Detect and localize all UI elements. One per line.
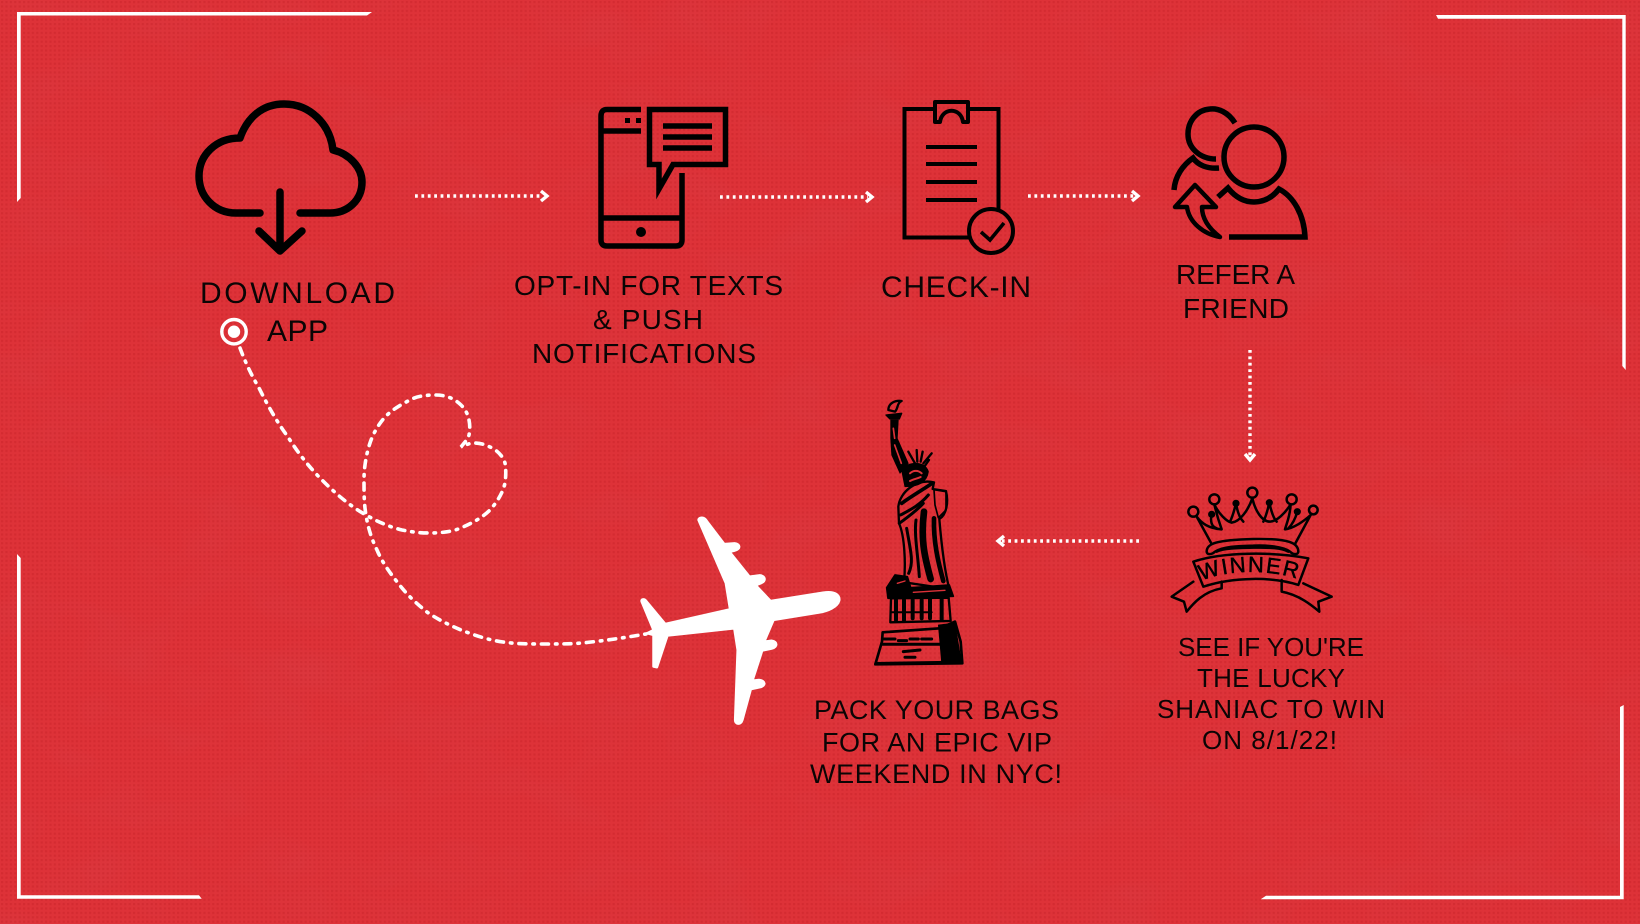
- arrow: refer down to winner: [1245, 350, 1255, 460]
- icon: white airplane: [642, 518, 839, 724]
- step 1: download app: [199, 104, 395, 348]
- icon: two people with up arrow: [1174, 109, 1305, 237]
- frame corner: bottom left: [17, 554, 202, 899]
- text: pack your bags for an epic vip weekend in nyc: [810, 695, 1062, 789]
- text: pack your bags for an epic vip weekend in nyc: WEEKEND IN NYC!: [810, 759, 1062, 789]
- text: see if you're the lucky shaniac to win on 8/1/22: THE LUCKY: [1197, 663, 1345, 693]
- dashed flight path with heart loop: [240, 348, 646, 644]
- text: opt-in for texts and push notifications: OPT-IN FOR TEXTS: [514, 270, 783, 301]
- icon: location pin marker: [222, 320, 246, 344]
- text: pack your bags for an epic vip weekend in nyc: PACK YOUR BAGS: [814, 695, 1059, 725]
- step 2: opt-in for texts and push notifications: [514, 110, 783, 369]
- icon: statue of liberty sketch: [875, 401, 962, 664]
- text: opt-in for texts and push notifications: [514, 270, 783, 369]
- step 4: refer a friend: [1174, 109, 1305, 324]
- step 5: see if you are the lucky winner: [1157, 486, 1385, 755]
- icon: cloud download: [199, 104, 362, 251]
- text: download app: DOWNLOAD: [200, 277, 395, 310]
- text: download app: [200, 277, 395, 348]
- step 3: check-in: [881, 102, 1031, 304]
- frame corner: bottom right: [1261, 705, 1624, 899]
- text: refer a friend: [1176, 259, 1295, 324]
- icon: phone with speech bubble: [601, 110, 726, 246]
- text: check-in: CHECK-IN: [881, 271, 1031, 304]
- icon: winner crown and banner: WINNER: [1196, 556, 1298, 580]
- arrow: download to opt-in: [415, 191, 547, 201]
- arrow: check-in to refer: [1028, 191, 1138, 201]
- text: see if you're the lucky shaniac to win on 8/1/22: SHANIAC TO WIN: [1157, 694, 1385, 724]
- text: pack your bags for an epic vip weekend in nyc: FOR AN EPIC VIP: [822, 728, 1052, 758]
- text: opt-in for texts and push notifications: & PUSH: [593, 304, 703, 335]
- arrow: winner back to statue: [998, 536, 1139, 546]
- icon: winner crown and banner: [1170, 486, 1333, 613]
- text: refer a friend: FRIEND: [1183, 293, 1289, 324]
- text: refer a friend: REFER A: [1176, 259, 1295, 290]
- step 6: pack your bags: [810, 401, 1062, 789]
- text: download app: APP: [267, 315, 328, 348]
- frame corner: top left: [17, 12, 372, 202]
- arrow: opt-in to check-in: [720, 192, 872, 202]
- text: see if you're the lucky shaniac to win on 8/1/22: [1157, 632, 1385, 755]
- text: opt-in for texts and push notifications: NOTIFICATIONS: [532, 338, 756, 369]
- text: see if you're the lucky shaniac to win on 8/1/22: SEE IF YOU'RE: [1178, 632, 1364, 662]
- icon: clipboard with check mark: [904, 102, 1013, 253]
- text: see if you're the lucky shaniac to win on 8/1/22: ON 8/1/22!: [1202, 725, 1337, 755]
- frame corner: top right: [1436, 15, 1626, 370]
